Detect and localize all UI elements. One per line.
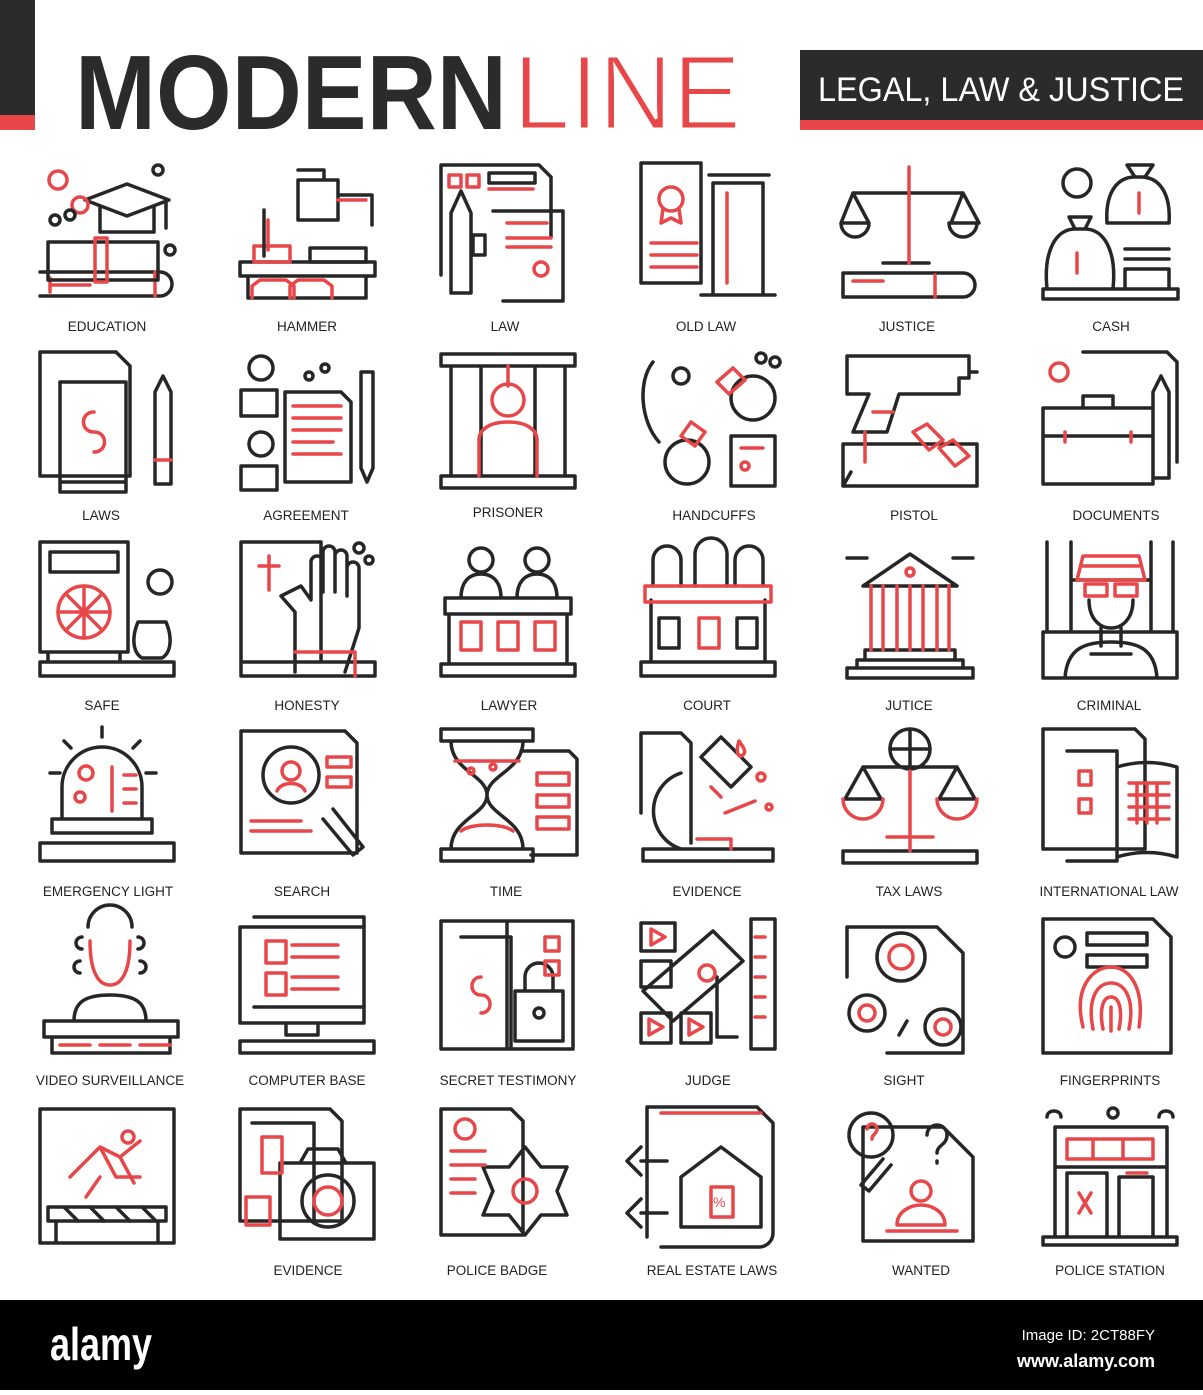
icon: police badge [441,1109,567,1235]
label: computer base: COMPUTER BASE [248,1073,366,1088]
label: search: SEARCH [274,884,330,899]
label: lawyer: LAWYER [481,698,538,713]
icon: court [641,538,775,676]
icon: fingerprints [1043,919,1171,1053]
label: justice building: JUTICE [885,698,933,713]
title: LINE [513,34,741,152]
icon: wanted [849,1113,973,1241]
icon: justice building [847,554,973,678]
icon: criminal [1043,542,1177,678]
label: law: LAW [491,319,520,334]
label: video surveillance: VIDEO SURVEILLANCE [36,1073,184,1088]
label: hammer: HAMMER [277,319,337,334]
icon: crime scene [40,1109,174,1243]
label: police station: POLICE STATION [1055,1263,1165,1278]
icon: time [441,729,577,861]
icon: international law [1043,729,1177,861]
label: emergency light: EMERGENCY LIGHT [43,884,173,899]
label: evidence: EVIDENCE [672,884,742,899]
label: fingerprints: FINGERPRINTS [1060,1073,1160,1088]
label: evidence: EVIDENCE [273,1263,343,1278]
label: pistol: PISTOL [890,508,938,523]
label: police badge: POLICE BADGE [447,1263,547,1278]
footer [0,1300,1203,1390]
label: wanted: WANTED [892,1263,950,1278]
icon: judge gavel [641,919,775,1049]
footer: alamy [50,1318,152,1370]
icon: sight [847,927,963,1053]
title: MODERN [75,34,507,152]
icon: justice [841,167,979,297]
icon: search [241,731,363,855]
icon: law [441,165,563,301]
header left bar [0,0,35,130]
icon: judge [44,905,178,1053]
icon: honesty [241,542,375,676]
icon: old law [641,163,775,295]
label: secret testimony: SECRET TESTIMONY [440,1073,576,1088]
label: court: COURT [683,698,731,713]
icon: real estate laws: % [713,1194,725,1210]
label: time: TIME [490,884,522,899]
label: old law: OLD LAW [676,319,736,334]
icon: real estate laws [627,1107,773,1247]
icon: safe [40,542,174,676]
subtitle box [800,50,1203,130]
icon: hammer [240,170,375,298]
footer: Image ID: 2CT88FY [1022,1327,1155,1344]
icon: secret testimony [441,921,573,1049]
label: documents: DOCUMENTS [1072,508,1160,523]
icon: documents [1043,352,1177,484]
label: agreement: AGREEMENT [263,508,349,523]
icon: police station [1043,1108,1177,1245]
icon: cash [1043,165,1178,299]
subtitle box: LEGAL, LAW & JUSTICE [818,71,1184,109]
label: prisoner: PRISONER [473,505,544,520]
icon: handcuffs [643,353,780,486]
label: handcuffs: HANDCUFFS [672,508,756,523]
label: safe: SAFE [84,698,120,713]
label: education: EDUCATION [68,319,146,334]
footer: www.alamy.com [1016,1351,1155,1371]
label: criminal: CRIMINAL [1077,698,1142,713]
icon: laws [40,352,171,492]
icon: emergency light [40,727,174,861]
label: cash: CASH [1092,319,1130,334]
label: international law: INTERNATIONAL LAW [1039,884,1179,899]
icon: pistol [843,356,977,486]
label: sight: SIGHT [883,1073,925,1088]
icon: education [40,165,175,296]
icon: agreement [241,356,373,490]
icon: tax laws [843,729,977,863]
label: real estate laws: REAL ESTATE LAWS [647,1263,777,1278]
icon: evidence camera [240,1109,374,1239]
label: honesty: HONESTY [274,698,340,713]
label: laws: LAWS [82,508,120,523]
icon: prisoner [441,354,575,488]
label: judge: JUDGE [685,1073,731,1088]
label: justice: JUSTICE [879,319,935,334]
icon: lawyer [441,548,575,676]
icon: evidence microscope [641,733,773,861]
icon: computer base [240,917,374,1053]
label: tax laws: TAX LAWS [876,884,942,899]
